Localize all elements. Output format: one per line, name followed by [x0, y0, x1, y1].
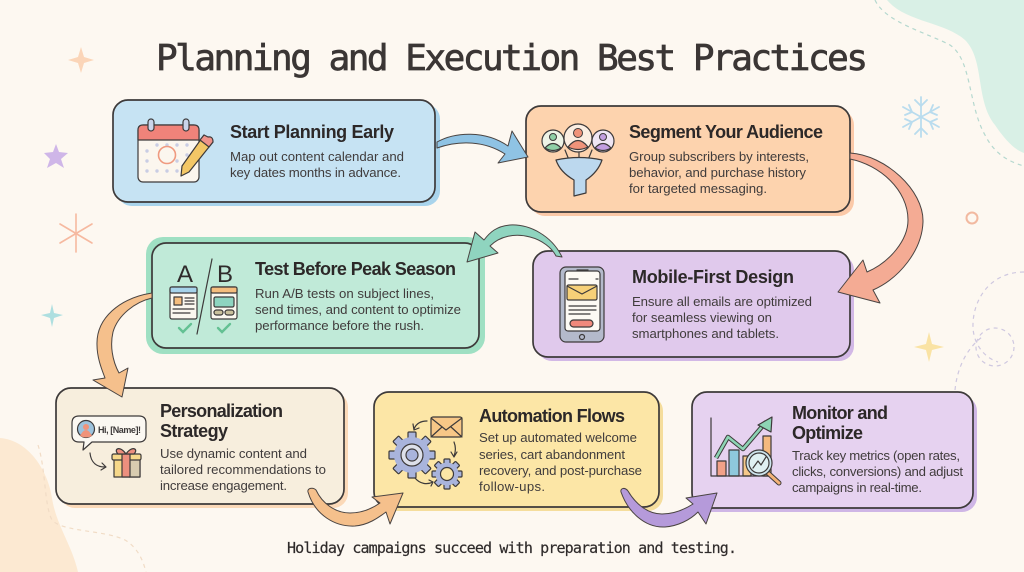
icon: chart and magnifier	[711, 417, 779, 483]
footer note: Holiday campaigns succeed with preparation and testing.	[287, 539, 737, 557]
heading: Segment Your Audience	[629, 122, 823, 142]
decoration: dashed circles	[955, 272, 1024, 390]
heading: Optimize	[792, 423, 863, 443]
decoration: mint blob top right	[875, 0, 1024, 166]
body text: performance before the rush.	[255, 318, 424, 333]
decoration: snowflake	[903, 97, 939, 137]
heading: Mobile-First Design	[632, 267, 794, 287]
icon: phone with email	[560, 267, 604, 342]
body text: smartphones and tablets.	[632, 326, 779, 341]
body text: key dates months in advance.	[230, 165, 401, 180]
decoration: peach blob bottom left	[0, 438, 146, 572]
panel: automation flows	[374, 392, 663, 511]
panel: segment your audience	[526, 106, 854, 216]
panel: personalization strategy	[56, 388, 348, 508]
body text	[792, 448, 963, 495]
body text: for targeted messaging.	[629, 181, 767, 196]
body text	[230, 149, 404, 180]
decoration: peach star	[68, 47, 94, 73]
heading: Monitor and	[792, 403, 888, 423]
icon: audience funnel	[542, 124, 614, 196]
panel: mobile-first design	[533, 251, 854, 361]
heading	[160, 401, 283, 441]
body text: Use dynamic content and	[160, 446, 307, 461]
body text	[255, 286, 461, 333]
body text: increase engagement.	[160, 478, 287, 493]
body text: send times, and content to optimize	[255, 302, 461, 317]
icon: chat bubble and gift: Hi, [Name]!	[98, 425, 141, 435]
body text: behavior, and purchase history	[629, 165, 806, 180]
icon: A/B test: A	[177, 261, 193, 288]
icon: calendar and pencil	[138, 119, 213, 182]
body text: Map out content calendar and	[230, 149, 404, 164]
decoration: teal sparkle	[41, 304, 63, 327]
arrow: salmon, segment to mobile	[838, 153, 923, 303]
body text: follow-ups.	[479, 479, 545, 494]
arrow: purple, automation to monitor	[621, 488, 717, 527]
body text: Ensure all emails are optimized	[632, 294, 812, 309]
body text: tailored recommendations to	[160, 462, 326, 477]
arrow: blue, planning to segment	[437, 131, 528, 163]
body text: Set up automated welcome	[479, 430, 637, 445]
decoration: purple star	[44, 144, 68, 168]
heading: Personalization	[160, 401, 283, 421]
arrow: orange, personalization to automation	[308, 488, 403, 526]
body text	[479, 430, 642, 494]
panel: monitor and optimize	[692, 392, 977, 512]
panel: test before peak season	[146, 237, 485, 354]
decoration: peach asterisk	[60, 214, 92, 252]
heading: Test Before Peak Season	[255, 259, 456, 279]
body text: recovery, and post-purchase	[479, 463, 642, 478]
body text: series, cart abandonment	[479, 447, 625, 462]
arrow: orange, test to personalization	[93, 293, 152, 397]
heading: Start Planning Early	[230, 122, 394, 142]
body text: Group subscribers by interests,	[629, 149, 809, 164]
body text	[160, 446, 326, 493]
body text: campaigns in real-time.	[792, 480, 922, 495]
icon: A/B test	[170, 259, 237, 334]
decoration: small ring	[966, 212, 978, 224]
title: Planning and Execution Best Practices	[156, 38, 868, 79]
icon: chat bubble and gift	[72, 416, 146, 477]
icon: gears and envelope	[389, 417, 462, 489]
decoration: yellow sparkle	[914, 332, 944, 362]
body text	[629, 149, 809, 196]
body text: clicks, conversions) and adjust	[792, 464, 963, 479]
heading: Automation Flows	[479, 406, 625, 426]
body text: Run A/B tests on subject lines,	[255, 286, 434, 301]
arrow: green, mobile to test	[467, 225, 562, 262]
heading: Strategy	[160, 421, 228, 441]
body text	[632, 294, 812, 341]
body text: for seamless viewing on	[632, 310, 772, 325]
heading	[792, 403, 888, 443]
panel: start planning early	[113, 100, 440, 206]
icon: A/B test: B	[217, 261, 233, 288]
body text: Track key metrics (open rates,	[792, 448, 960, 463]
